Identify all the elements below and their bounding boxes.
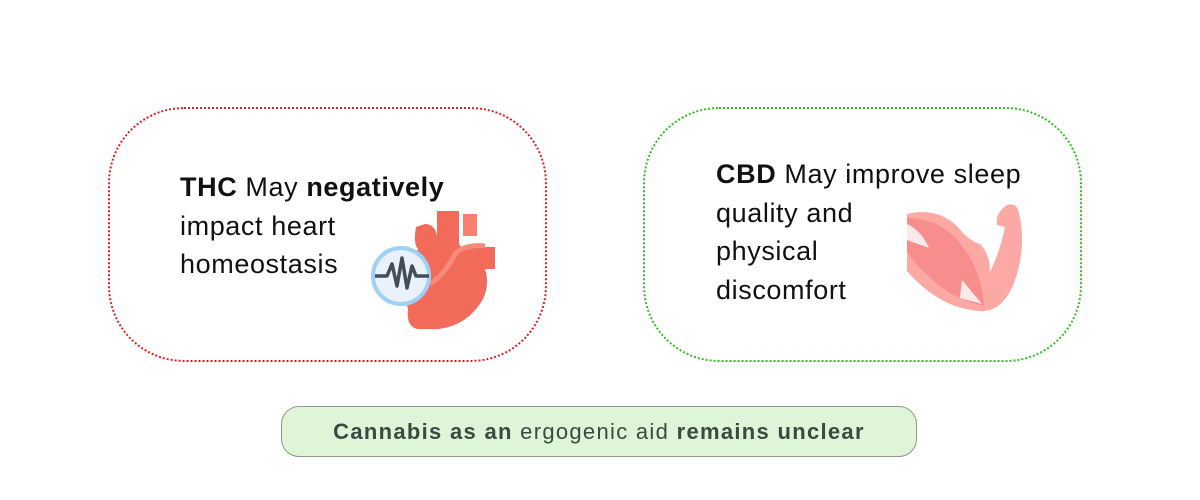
callout: conclusion: [281, 406, 917, 457]
text: CBD statement: physical: [716, 236, 818, 266]
text: CBD statement: CBD May improve sleep: [716, 159, 1021, 189]
text: CBD statement: discomfort: [716, 274, 847, 304]
panel: CBD: [643, 107, 1082, 362]
callout: conclusion: Cannabis as an ergogenic aid remains unclear: [333, 419, 865, 444]
text: THC statement: impact heart: [180, 210, 336, 240]
text: THC statement: THC May negatively: [180, 172, 444, 202]
panel: THC: [108, 107, 547, 362]
text: CBD statement: [716, 159, 1021, 304]
text: THC statement: homeostasis: [180, 249, 338, 279]
icon: heart with pulse: [371, 211, 495, 329]
text: THC statement: [180, 172, 444, 279]
icon: flexed arm: [907, 204, 1022, 312]
text: CBD statement: quality and: [716, 198, 853, 228]
